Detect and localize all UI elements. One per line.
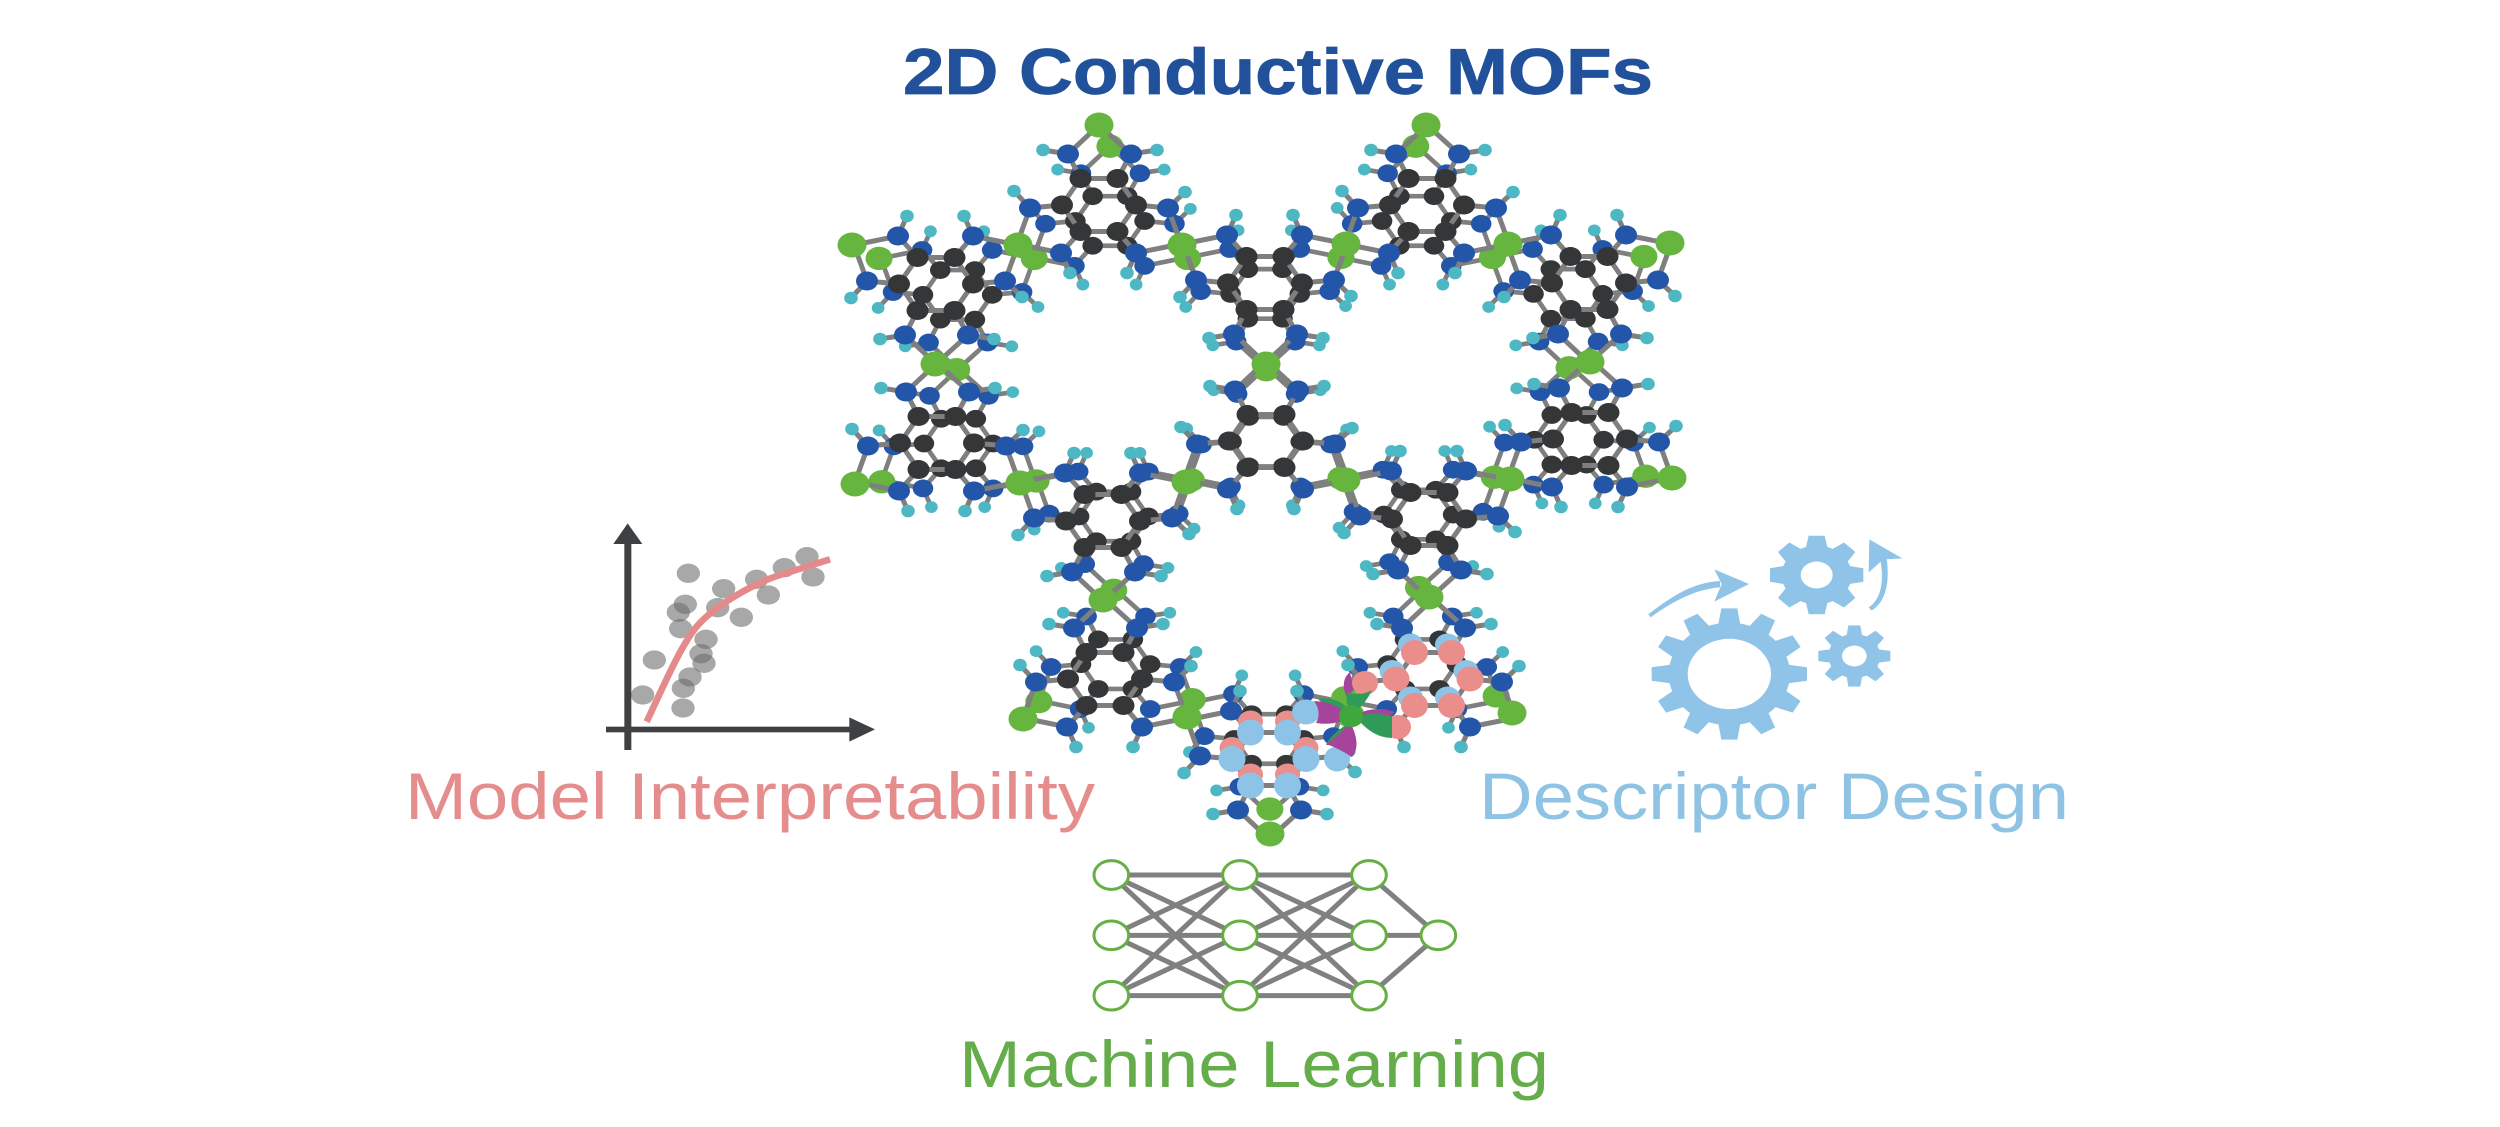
front layer of the framework — [838, 112, 1686, 846]
text: Descriptor Design: Descriptor Design — [1479, 759, 2069, 833]
small gear — [1818, 625, 1890, 687]
scatter plot icon — [606, 523, 875, 750]
title: 2D Conductive MOFs — [903, 35, 1653, 108]
nodes — [1094, 861, 1456, 1010]
axes — [606, 523, 875, 750]
text: Model Interpretability: Model Interpretability — [405, 759, 1095, 833]
curved arrow right — [1869, 539, 1902, 611]
fit curve — [647, 559, 830, 722]
curved arrow left — [1648, 569, 1749, 617]
gears icon — [1648, 536, 1902, 740]
data points — [631, 547, 825, 718]
orbital lobes around the central metal — [1292, 671, 1411, 772]
back layer of the framework — [865, 135, 1659, 821]
molecular framework: 2D conductive MOF — [838, 112, 1686, 846]
connections — [1111, 875, 1438, 996]
highlighted unit: salmon atoms with blue lobes — [1380, 634, 1484, 718]
neural network icon — [1094, 861, 1456, 1010]
highlighted unit: blue atoms with salmon lobes — [1218, 710, 1320, 798]
large gear — [1652, 608, 1807, 740]
medium gear — [1770, 536, 1863, 614]
text: Machine Learning: Machine Learning — [959, 1027, 1549, 1101]
